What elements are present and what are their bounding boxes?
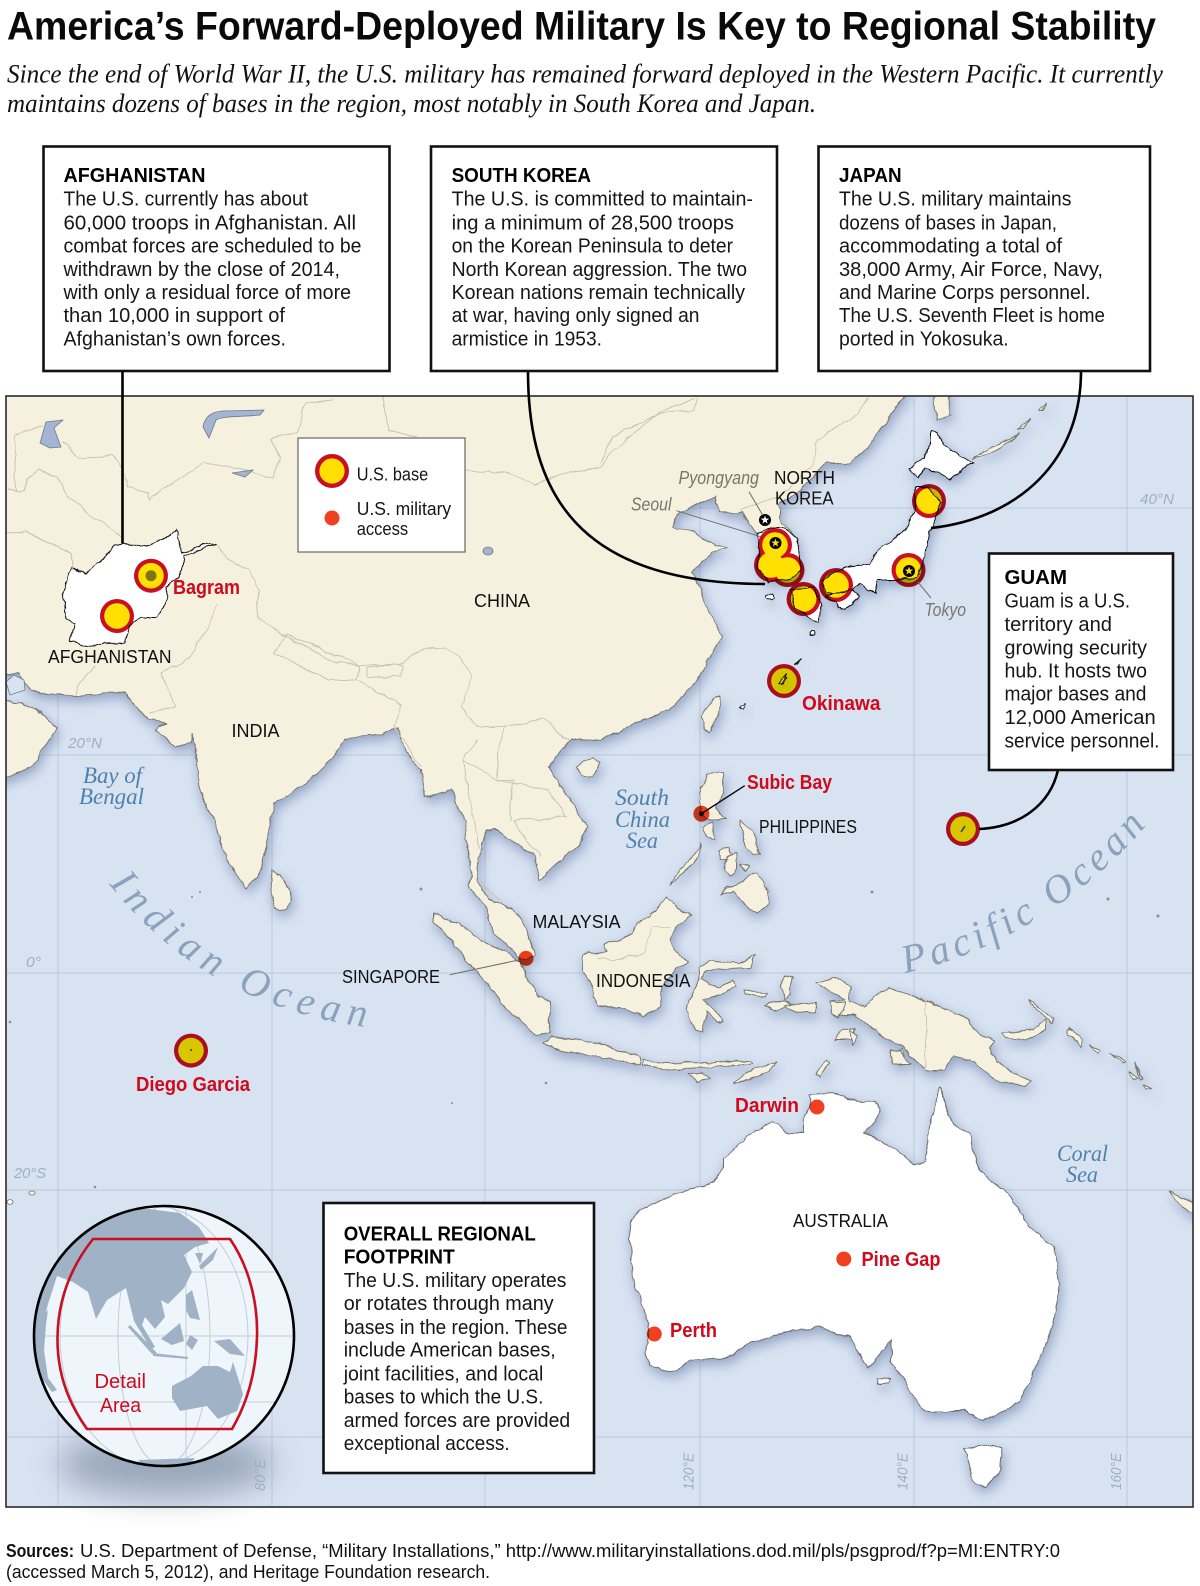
sea labels: Coral — [1057, 1141, 1108, 1166]
legend symbol: U.S. military access — [324, 510, 340, 526]
land masses — [0, 385, 1200, 1488]
locator globe: Detail — [94, 1371, 146, 1393]
map frame — [6, 396, 1193, 1507]
panel: South Korea: North Korean aggression. The two — [452, 259, 747, 281]
panel: Afghanistan: than 10,000 in support of — [64, 305, 285, 327]
panel: Japan: dozens of bases in Japan, — [839, 212, 1057, 234]
panel: Guam: growing security — [1004, 637, 1147, 659]
panel: Afghanistan: combat forces are scheduled to be — [64, 236, 362, 258]
place labels: KOREA — [775, 489, 834, 509]
panel: Japan: accommodating a total of — [839, 236, 1062, 258]
base name labels: Diego Garcia — [136, 1074, 251, 1096]
sources: (accessed March 5, 2012), and Heritage Foundation research. — [6, 1562, 490, 1582]
panel: overall regional footprint: joint facilities, and local — [343, 1363, 543, 1385]
panel: Japan: 38,000 Army, Air Force, Navy, — [839, 259, 1103, 281]
legend symbol: U.S. base — [317, 456, 347, 486]
sea labels — [79, 763, 1108, 1187]
place labels: INDONESIA — [596, 971, 690, 991]
latitude and longitude labels: 140°E — [894, 1452, 912, 1490]
connector lines — [122, 371, 1081, 829]
legend: access — [357, 519, 408, 539]
panel: Japan: ported in Yokosuka. — [839, 328, 1009, 350]
panel: overall regional footprint: bases to which the U.S. — [344, 1387, 543, 1409]
panel: South Korea — [431, 146, 777, 371]
place labels: INDIA — [232, 721, 280, 741]
base name labels: Perth — [670, 1320, 717, 1342]
place labels: Tokyo — [924, 600, 966, 620]
panel: Guam: major bases and — [1004, 684, 1146, 706]
latitude and longitude labels: 20°S — [13, 1165, 46, 1182]
subtitle — [7, 60, 1163, 118]
legend: U.S. military — [357, 499, 451, 519]
legend — [298, 438, 465, 552]
base name labels: Okinawa — [802, 693, 881, 715]
locator globe — [20, 1205, 300, 1470]
place labels: Pyongyang — [678, 468, 759, 488]
panel: overall regional footprint: exceptional access. — [344, 1433, 510, 1455]
latitude and longitude labels: 40°N — [1140, 491, 1174, 508]
panel: Guam: hub. It hosts two — [1004, 661, 1147, 683]
panel: Japan: The U.S. Seventh Fleet is home — [839, 305, 1105, 327]
panel: South Korea: ing a minimum of 28,500 troops — [452, 212, 734, 234]
borders — [7, 397, 925, 1071]
panel: Afghanistan: 60,000 troops in Afghanistan. All — [64, 212, 356, 234]
sea labels: Bengal — [79, 784, 144, 809]
panel: Afghanistan: AFGHANISTAN — [64, 165, 206, 187]
panel: Japan: JAPAN — [839, 165, 902, 187]
panel: overall regional footprint: OVERALL REGIONAL — [344, 1223, 536, 1245]
panel: overall regional footprint: armed forces are provided — [344, 1410, 570, 1432]
detail area outline — [57, 1239, 257, 1429]
base name labels: Bagram — [173, 577, 240, 599]
title: America’s Forward-Deployed Military Is Key to Regional Stability — [7, 4, 1157, 48]
sources: Sources: — [6, 1541, 74, 1561]
sea labels: China — [615, 807, 670, 832]
panel: South Korea: at war, having only signed an — [452, 305, 700, 327]
globe shadow — [58, 1432, 274, 1496]
panel: overall regional footprint: include American bases, — [344, 1340, 556, 1362]
latitude and longitude labels — [13, 491, 1174, 1491]
latitude and longitude labels: 120°E — [680, 1452, 698, 1490]
place labels: SINGAPORE — [342, 967, 440, 987]
sources: U.S. Department of Defense, “Military Installations,” http://www.militaryinstallations.dod.mil/pls/psgprod/f?p=MI:ENTRY:0 — [80, 1541, 1060, 1561]
base name labels: Subic Bay — [747, 772, 833, 794]
place labels: Seoul — [631, 495, 672, 515]
lakes — [6, 410, 493, 695]
subtitle: maintains dozens of bases in the region, most notably in South Korea and Japan. — [7, 89, 816, 118]
place labels: MALAYSIA — [532, 912, 620, 932]
panel: Japan — [818, 146, 1150, 371]
panel: overall regional footprint — [324, 1203, 594, 1473]
panel: Afghanistan — [44, 146, 390, 371]
panel: Japan: and Marine Corps personnel. — [839, 282, 1091, 304]
ocean labels: Indian Ocean — [109, 870, 366, 1027]
legend: U.S. base — [357, 465, 428, 485]
ocean labels: Pacific Ocean — [902, 816, 1146, 974]
panel: overall regional footprint: or rotates through many — [344, 1293, 554, 1315]
panel: Afghanistan: The U.S. currently has about — [64, 189, 308, 211]
panel: overall regional footprint: bases in the region. These — [344, 1317, 568, 1339]
panel: South Korea: SOUTH KOREA — [452, 165, 591, 187]
panel: Afghanistan: with only a residual force of more — [63, 282, 351, 304]
panel: overall regional footprint: FOOTPRINT — [344, 1247, 455, 1269]
base name labels: Darwin — [735, 1095, 799, 1117]
panel: Afghanistan: Afghanistan’s own forces. — [64, 328, 286, 350]
sea labels: South — [615, 785, 669, 810]
base name labels: Pine Gap — [862, 1249, 940, 1271]
latitude and longitude labels: 20°N — [67, 735, 102, 752]
capital and base details — [146, 514, 965, 1051]
panel: Guam: 12,000 American — [1004, 707, 1156, 729]
latitude and longitude labels: 80°E — [252, 1458, 269, 1491]
latitude and longitude labels: 0° — [26, 954, 41, 971]
place labels — [48, 468, 966, 1231]
place labels: AUSTRALIA — [793, 1211, 888, 1231]
sea labels: Sea — [626, 828, 658, 853]
U.S. base markers — [100, 484, 980, 1068]
place labels: AFGHANISTAN — [48, 647, 172, 667]
panel: Afghanistan: withdrawn by the close of 2014, — [63, 259, 340, 281]
panel: Guam: service personnel. — [1004, 730, 1160, 752]
leader lines — [450, 492, 931, 975]
panel: South Korea: Korean nations remain technically — [452, 282, 745, 304]
place labels: CHINA — [474, 591, 530, 611]
locator globe: Area — [100, 1395, 142, 1417]
U.S. military access dots — [518, 786, 851, 1342]
map — [0, 385, 1200, 1507]
panel: Guam: territory and — [1004, 614, 1112, 636]
panel: Guam: GUAM — [1004, 567, 1067, 589]
small islands — [9, 888, 1160, 1188]
panel: South Korea: on the Korean Peninsula to deter — [452, 236, 733, 258]
panel: Guam: Guam is a U.S. — [1004, 591, 1130, 613]
ocean labels — [109, 816, 1146, 1027]
panel: South Korea: The U.S. is committed to maintain- — [452, 189, 753, 211]
panel: Japan: The U.S. military maintains — [839, 189, 1072, 211]
sources — [6, 1541, 1060, 1582]
panel: Guam — [989, 554, 1173, 770]
sea labels: Sea — [1066, 1162, 1098, 1187]
place labels: PHILIPPINES — [759, 817, 857, 837]
panel: overall regional footprint: The U.S. military operates — [344, 1270, 566, 1292]
panel: South Korea: armistice in 1953. — [452, 328, 602, 350]
subtitle: Since the end of World War II, the U.S. military has remained forward deployed in the Western Pacific. It currently — [7, 60, 1163, 89]
place labels: NORTH — [774, 468, 835, 488]
base name labels — [136, 577, 940, 1342]
sea labels: Bay of — [83, 763, 146, 788]
latitude and longitude labels: 160°E — [1108, 1452, 1125, 1490]
